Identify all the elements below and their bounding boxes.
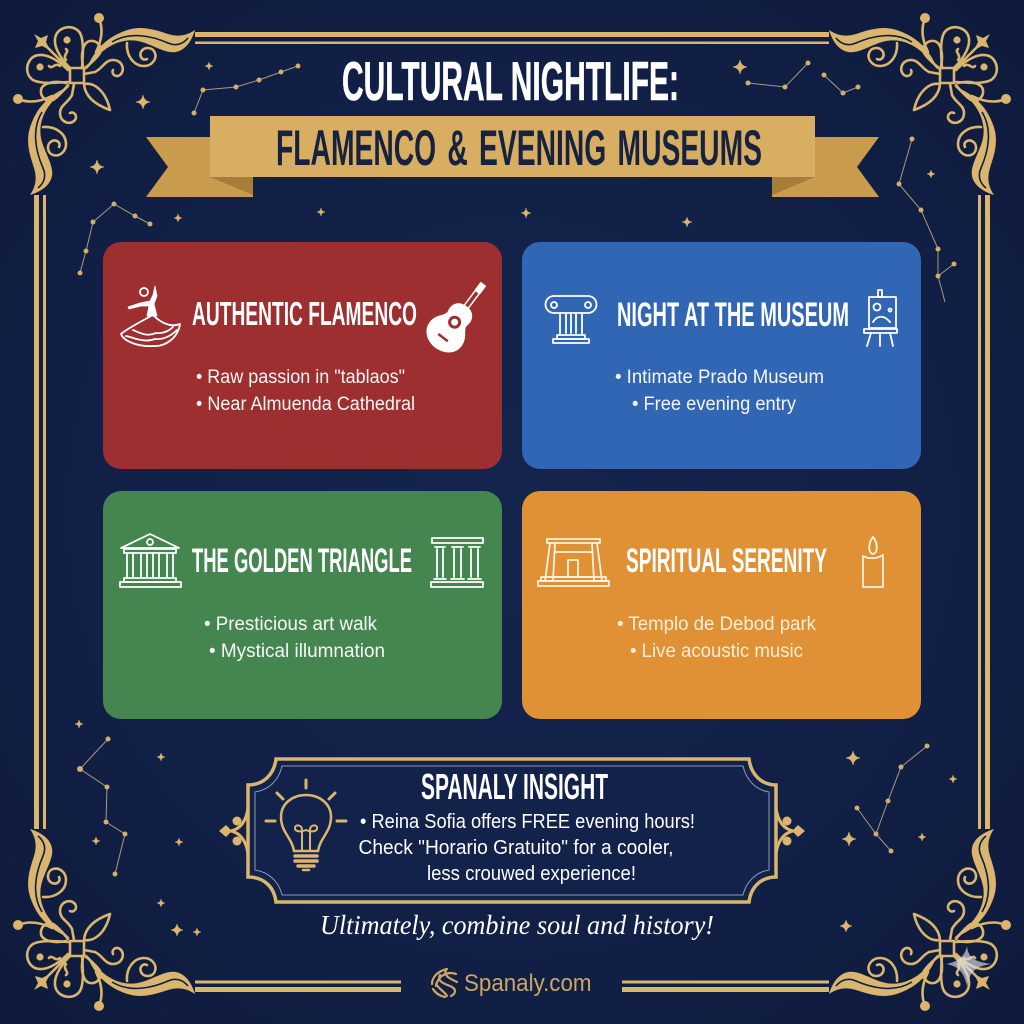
corner ornament: bottom-right xyxy=(829,829,1011,1011)
tagline: Ultimately, combine soul and history! xyxy=(320,910,714,940)
bullet list: authentic flamenco: • Near Almuenda Cathedral xyxy=(196,394,415,415)
bullet list: night at the museum xyxy=(615,367,824,415)
corner ornament: top-left xyxy=(13,13,195,195)
brand name: Spanaly.com xyxy=(464,970,592,997)
icon: light bulb xyxy=(266,780,346,870)
corner ornament: top-right xyxy=(829,13,1011,195)
bullet list: spiritual serenity xyxy=(617,614,816,662)
panel: authentic flamenco xyxy=(103,242,502,469)
icon: ionic column xyxy=(546,296,596,343)
icon: candle xyxy=(863,537,883,587)
heading: night at the museum: NIGHT AT THE MUSEUM xyxy=(617,296,849,334)
panel: night at the museum xyxy=(522,242,921,469)
constellations xyxy=(77,60,956,876)
icon: temple of debod xyxy=(538,539,609,586)
bullet list: the golden triangle xyxy=(204,614,385,662)
bullet list: the golden triangle: • Mystical illumnation xyxy=(209,641,385,662)
bullet list: the golden triangle: • Presticious art walk xyxy=(204,614,377,635)
stars xyxy=(75,60,957,936)
corner ornament: bottom-left xyxy=(13,829,195,1011)
icon: easel xyxy=(864,290,897,346)
bullet list: spiritual serenity: • Templo de Debod park xyxy=(617,614,816,635)
panel: spanaly insight xyxy=(219,759,805,902)
title: CULTURAL NIGHTLIFE: xyxy=(342,50,679,112)
panel: spiritual serenity xyxy=(522,491,921,719)
bullet list: night at the museum: • Intimate Prado Museum xyxy=(615,367,824,388)
icon: flamenco dancer xyxy=(121,286,180,346)
heading: spiritual serenity: SPIRITUAL SERENITY xyxy=(626,542,827,580)
bullet list: authentic flamenco: • Raw passion in "tablaos" xyxy=(196,367,405,388)
heading: spanaly insight: SPANALY INSIGHT xyxy=(421,766,608,807)
bullet list: night at the museum: • Free evening entry xyxy=(632,394,796,415)
icon: spanaly logo xyxy=(432,969,457,997)
insight text: • Reina Sofia offers FREE evening hours! xyxy=(360,811,695,833)
bullet list: authentic flamenco xyxy=(196,367,415,415)
icon: colonnade xyxy=(431,538,483,587)
sparkle watermark xyxy=(946,946,992,986)
icon: museum building xyxy=(120,534,181,587)
insight text xyxy=(358,811,695,885)
ribbon banner xyxy=(146,116,879,197)
panel: the golden triangle xyxy=(103,491,502,719)
heading: authentic flamenco: AUTHENTIC FLAMENCO xyxy=(192,295,417,332)
ornament: insight frame right xyxy=(776,808,805,854)
heading: the golden triangle: THE GOLDEN TRIANGLE xyxy=(192,542,412,580)
bullet list: spiritual serenity: • Live acoustic music xyxy=(630,641,803,662)
insight text: Check "Horario Gratuito" for a cooler, xyxy=(358,837,674,859)
insight text: less crouwed experience! xyxy=(427,863,636,885)
icon: guitar xyxy=(419,272,499,360)
ornament: insight frame left xyxy=(219,808,248,854)
